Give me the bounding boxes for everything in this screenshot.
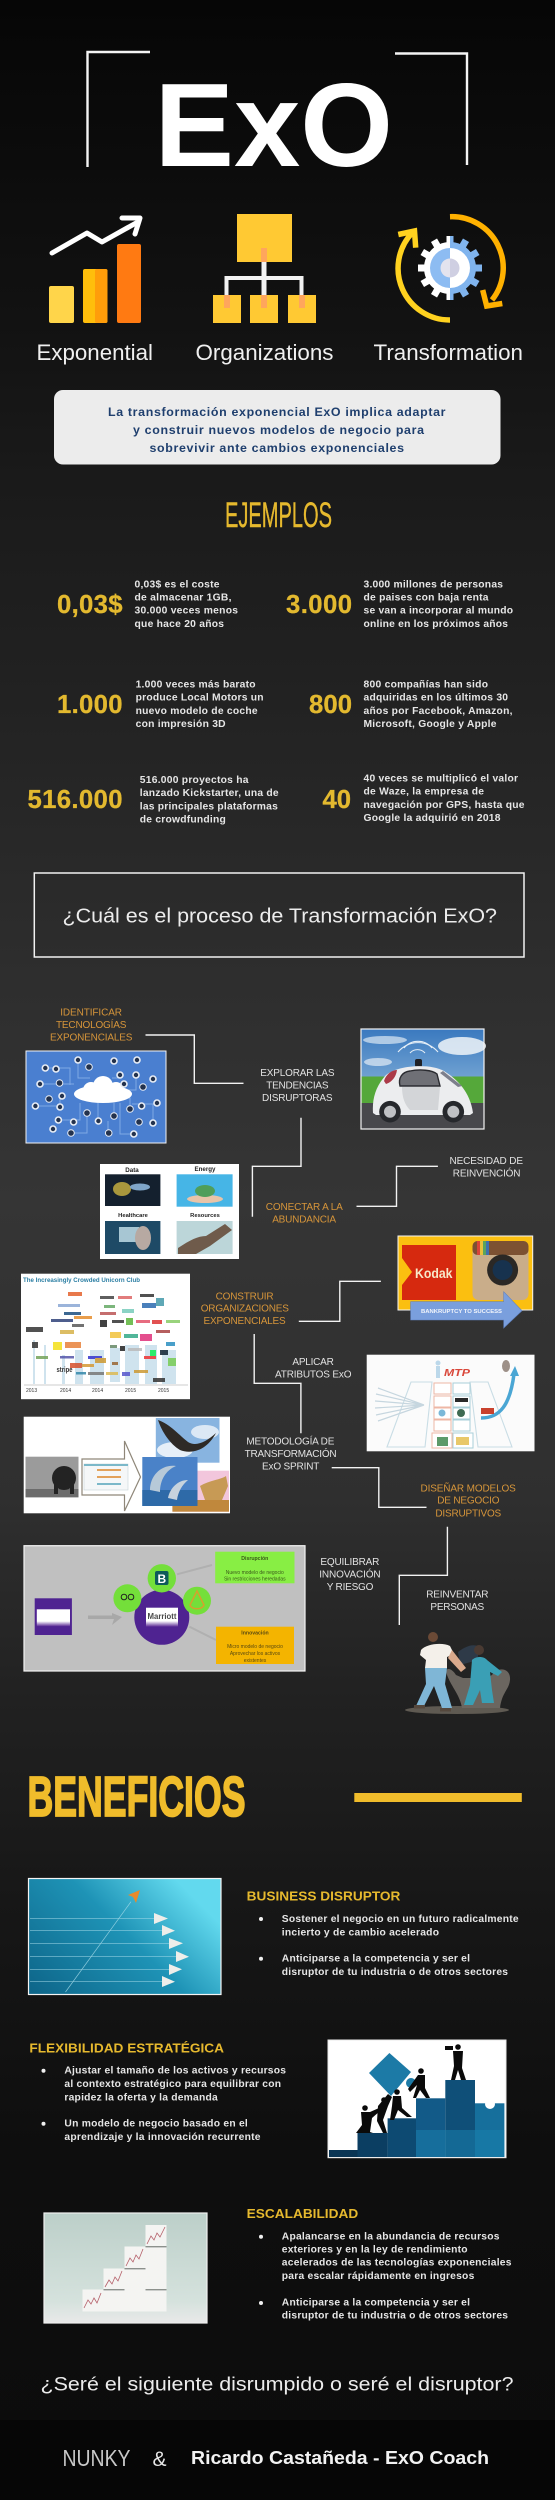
benefit: business disruptor: BUSINESS DISRUPTOR [247,1890,400,1904]
benefit: escalabilidad: disruptor de tu industria o de otros sectores [282,2311,508,2322]
image: species evolution [24,1417,230,1513]
benefit: escalabilidad: acelerados de las tecnologías exponenciales [282,2258,512,2269]
icon: organization tree [213,214,316,323]
benefit: business disruptor [247,1890,519,1978]
image: marriott business model: Innovación [241,1630,269,1636]
stat: 40: Google la adquirió en 2018 [364,813,501,824]
image: marriott business model: B [158,1572,166,1586]
step: explorar tendencias: DISRUPTORAS [262,1093,333,1104]
image: abundance grid: Energy [195,1166,216,1173]
image: marriott business model: Disrupción [241,1556,268,1562]
stat: 40: navegación por GPS, hasta que [364,800,525,811]
stat: 3.000: 3.000 [286,591,352,619]
step: metodología exo sprint: ExO SPRINT [262,1461,319,1472]
step: reinventar personas: PERSONAS [430,1602,485,1613]
stat: 1.000 [57,679,264,730]
benefit: escalabilidad: para escalar rápidamente en ingresos [282,2271,475,2282]
stat: 800: Microsoft, Google y Apple [364,719,497,730]
benefit: escalabilidad: exteriores y en la ley de rendimiento [282,2245,468,2256]
step: aplicar atributos [275,1357,352,1381]
benefit: flexibilidad estratégica: FLEXIBILIDAD ESTRATÉGICA [29,2041,224,2056]
process question box: ¿Cuál es el proceso de Transformación ExO? [62,905,497,928]
benefit: business disruptor: Sostener el negocio en un futuro radicalmente [282,1914,519,1925]
benefit: flexibilidad estratégica: rapidez la oferta y la demanda [64,2092,218,2103]
step: necesidad de reinvención [450,1156,523,1179]
benefit: business disruptor: incierto y de cambio acelerado [282,1927,439,1938]
stat: 0,03$: de almacenar 1GB, [134,593,232,604]
image: unicorn club chart: 2015 [158,1388,169,1394]
stat: 1.000: 1.000 veces más barato [136,679,256,690]
stat: 516.000 [28,775,279,826]
step: diseñar modelos: DE NEGOCIO [437,1496,500,1507]
step: construir organizaciones: CONSTRUIR [216,1291,274,1302]
stat: 0,03$ [57,579,238,630]
title: ExO [154,59,393,192]
stat: 40: 40 [322,786,351,814]
benefit: flexibilidad estratégica: al contexto estratégico para equilibrar con [64,2079,281,2090]
image: marriott business model: Aprovechar los activos [230,1651,281,1657]
step: equilibrar innovación y riesgo [319,1557,381,1593]
arrow: metodología to diseñar [332,1468,426,1507]
image: abundance grid: Healthcare [118,1213,149,1219]
benefit: flexibilidad estratégica: Ajustar el tamaño de los activos y recursos [64,2066,286,2077]
image: MTP canvas: MTP [444,1367,471,1379]
icon labels [36,340,523,365]
footer band: Ricardo Castañeda - ExO Coach [191,2448,489,2468]
benefit: escalabilidad: Anticiparse a la competencia y ser el [282,2298,470,2309]
stat: 0,03$: 0,03$ es el coste [134,579,220,590]
arrow: construir to metodología [254,1334,301,1433]
step: metodología exo sprint [245,1434,337,1472]
stat: 516.000: 516.000 [28,786,122,814]
stat: 1.000: nuevo modelo de coche [136,706,258,717]
intro callout: y construir nuevos modelos de negocio para [133,423,424,437]
step: conectar a la abundancia: CONECTAR A LA [266,1202,343,1213]
icon labels: Organizations [196,340,334,365]
step: conectar a la abundancia: ABUNDANCIA [272,1214,336,1225]
benefit: flexibilidad estratégica [29,2041,286,2143]
stat: 40: de Waze, la empresa de [364,787,484,798]
stat: 3.000 [286,579,513,630]
step: construir organizaciones [201,1291,289,1327]
image: marriott business model: Marriott [148,1611,177,1621]
stat: 0,03$: que hace 20 años [134,619,224,630]
stat: 516.000: lanzado Kickstarter, una de [140,788,279,799]
stat: 0,03$: 0,03$ [57,591,122,619]
image: MTP canvas [367,1355,534,1451]
image: kodak to instagram: Kodak [415,1266,453,1281]
image: marriott business model: Sin restricciones heredadas [224,1577,286,1583]
arrow: identificar to explorar [146,1035,244,1083]
stat: 800: años por Facebook, Amazon, [364,706,513,717]
step: metodología exo sprint: TRANSFORMACIÓN [245,1447,337,1460]
stat: 3.000: 3.000 millones de personas [364,579,503,590]
stat: 0,03$: 30.000 veces menos [134,606,238,617]
benefit: escalabilidad: ESCALABILIDAD [247,2207,358,2221]
heading: ejemplos: EJEMPLOS [225,496,332,535]
image: abundance grid: Data [125,1167,139,1174]
stat: 1.000: con impresión 3D [136,719,226,730]
step: equilibrar innovación y riesgo: INNOVACIÓN [319,1567,381,1580]
arrow: diseñar to reinventar [399,1527,447,1625]
image: self-driving car [361,1029,486,1129]
intro callout [54,390,500,464]
step: equilibrar innovación y riesgo: Y RIESGO [327,1582,374,1593]
heading: beneficios: BENEFICIOS [28,1765,246,1829]
step: diseñar modelos [420,1481,516,1519]
benefit: escalabilidad [247,2207,512,2322]
image: marriott business model: Micro modelo de negocio [227,1644,283,1650]
image: cloud network [26,1051,166,1143]
footer band: & [152,2448,167,2471]
image: paper planes [28,1878,221,1994]
step: reinventar personas [426,1590,488,1613]
intro callout: sobrevivir ante cambios exponenciales [150,441,404,455]
icon: growth chart [49,218,141,323]
image: marriott business model: existentes [244,1658,267,1664]
image: kodak to instagram [398,1236,533,1328]
step: equilibrar innovación y riesgo: EQUILIBRAR [320,1557,379,1568]
stat: 3.000: online en los próximos años [364,619,508,630]
stat: 516.000: 516.000 proyectos ha [140,775,249,786]
image: unicorn club chart: 2014 [60,1388,71,1394]
icon: gear with rotating arrows [398,217,503,320]
step: aplicar atributos: ATRIBUTOS ExO [275,1370,352,1381]
stat: 800: 800 compañías han sido [364,679,488,690]
benefit: flexibilidad estratégica: Un modelo de negocio basado en el [64,2119,248,2130]
benefit: business disruptor: Anticiparse a la competencia y ser el [282,1954,470,1965]
stat: 3.000: de paises con baja renta [364,593,489,604]
footer band [0,2420,555,2500]
step: explorar tendencias: TENDENCIAS [266,1081,329,1092]
image: marriott business model: Nuevo modelo de negocio [226,1570,284,1576]
image: abundance grid: Resources [190,1213,220,1219]
benefit: escalabilidad: Apalancarse en la abundancia de recursos [282,2231,500,2242]
stat: 1.000: 1.000 [57,691,122,719]
step: explorar tendencias [260,1068,335,1104]
step: diseñar modelos: DISRUPTIVOS [435,1508,502,1519]
image: unicorn club chart: 2013 [26,1388,37,1394]
step: identificar tecnologías: EXPONENCIALES [50,1033,133,1044]
footer band: NUNKY [62,2445,130,2471]
benefit: business disruptor: disruptor de tu industria o de otros sectores [282,1967,508,1978]
stat: 516.000: de crowdfunding [140,815,226,826]
image: growth cubes [44,2213,207,2323]
arrow: construir to kodak [299,1281,381,1321]
arrow: explorar to conectar [252,1118,301,1217]
stat: 3.000: se van a incorporar al mundo [364,606,513,617]
image: abundance grid [100,1164,239,1259]
stat: 800: adquiridas en los últimos 30 [364,693,508,704]
step: identificar tecnologías [50,1008,133,1044]
benefit: flexibilidad estratégica: aprendizaje y la innovación recurrente [64,2132,261,2143]
icon labels: Exponential [36,340,153,365]
image: unicorn club chart: 2015 [125,1388,136,1394]
step: construir organizaciones: EXPONENCIALES [204,1316,286,1327]
process question box [34,873,524,957]
stat: 800: 800 [309,691,352,719]
step: aplicar atributos: APLICAR [292,1357,334,1368]
stat: 516.000: las principales plataformas [140,801,278,812]
image: unicorn club chart [21,1274,190,1399]
stat: 40 [322,773,525,824]
image: unicorn club chart: stripe [56,1365,72,1374]
title [88,52,467,192]
step: identificar tecnologías: IDENTIFICAR [60,1008,122,1019]
step: diseñar modelos: DISEÑAR MODELOS [420,1481,516,1494]
step: explorar tendencias: EXPLORAR LAS [260,1068,335,1079]
image: kodak to instagram: BANKRUPTCY TO SUCCESS [421,1309,502,1315]
step: conectar a la abundancia [266,1202,343,1225]
step: necesidad de reinvención: REINVENCIÓN [453,1166,520,1179]
image: puzzle teamwork [328,2040,506,2158]
arrow: conectar to necesidad [356,1166,438,1206]
icon labels: Transformation [374,340,523,365]
step: identificar tecnologías: TECNOLOGÍAS [56,1018,127,1031]
intro callout: La transformación exponencial ExO implica adaptar [108,405,446,419]
closing question: ¿Seré el siguiente disrumpido o seré el disruptor? [40,2374,514,2396]
image: unicorn club chart: 2014 [92,1388,103,1394]
stat: 40: 40 veces se multiplicó el valor [364,773,518,784]
stat: 1.000: produce Local Motors un [136,693,264,704]
stat: 800 [309,679,513,730]
image: marriott business model [24,1546,305,1671]
image: unicorn club chart: The Increasingly Crowded Unicorn Club [23,1278,140,1284]
step: reinventar personas: REINVENTAR [426,1590,488,1601]
step: metodología exo sprint: METODOLOGÍA DE [246,1434,335,1447]
step: necesidad de reinvención: NECESIDAD DE [450,1156,523,1167]
step: construir organizaciones: ORGANIZACIONES [201,1304,289,1315]
illustration: man and woman in armchair [405,1632,510,1714]
